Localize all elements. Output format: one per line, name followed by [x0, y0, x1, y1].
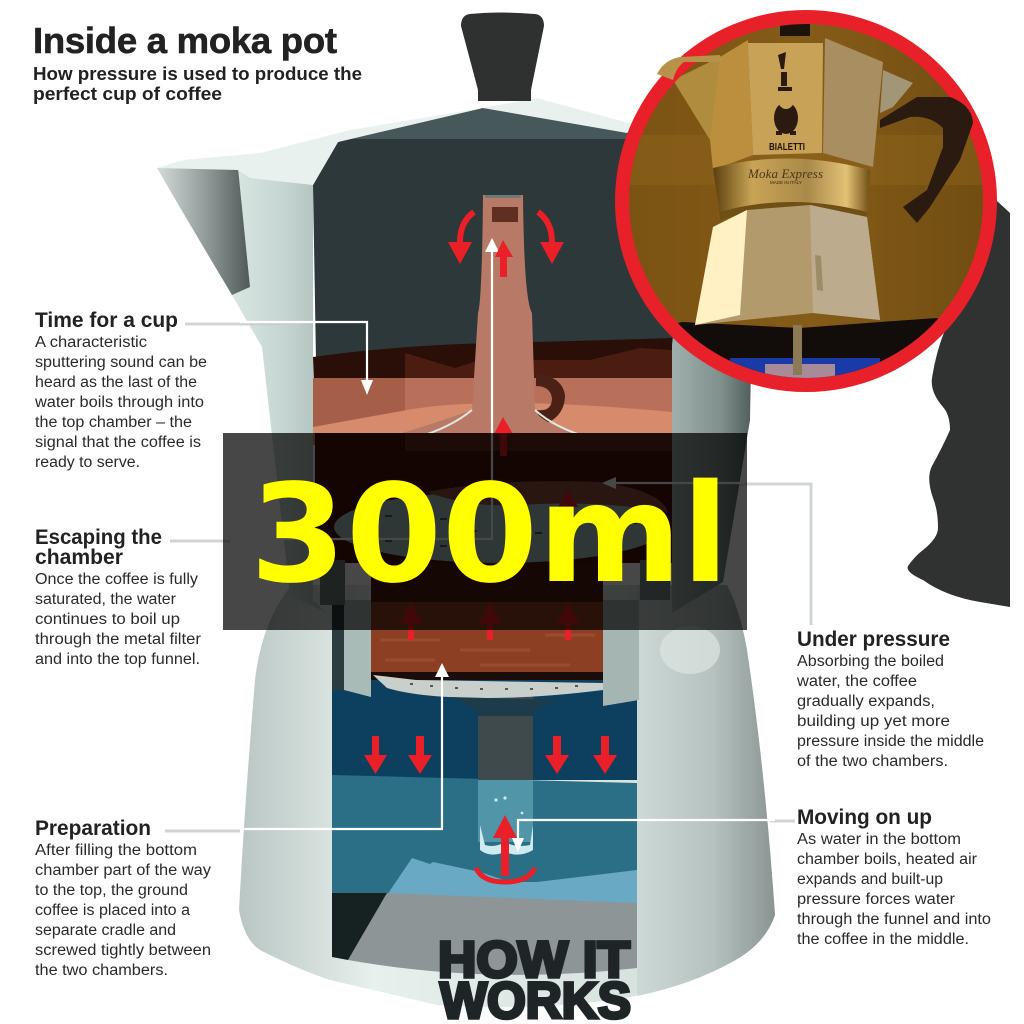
text block: Under pressure: water, the coffee [796, 673, 917, 690]
text block: Preparation: separate cradle and [35, 922, 176, 939]
text block: Escaping the chamber: and into the top funnel. [35, 651, 200, 668]
text block: Time for a cup: ready to serve. [35, 454, 140, 471]
text block: Under pressure [796, 628, 984, 770]
callout leader lines [225, 250, 775, 842]
lower chamber cutaway [332, 600, 637, 975]
text block: Escaping the chamber: through the metal filter [35, 631, 201, 648]
How It Works logo [438, 931, 631, 1024]
middle chamber and filter plate [315, 433, 672, 605]
text block: Time for a cup: A characteristic [35, 334, 147, 351]
upper chamber interior [313, 108, 700, 360]
handle [900, 190, 1010, 607]
metal sleeves of lower filter [344, 600, 639, 706]
curved arrow right [538, 212, 552, 242]
band script: Moka Express [747, 166, 823, 181]
band small text: MADE IN ITALY [770, 180, 802, 185]
collar band [713, 158, 870, 217]
text block: Moving on up: pressure forces water [797, 891, 955, 908]
How It Works logo: HOW IT [438, 931, 630, 988]
text block: Time for a cup: Time for a cup [35, 309, 178, 332]
bialetti logo figure [774, 52, 798, 135]
text block: Time for a cup: heard as the last of the [35, 374, 197, 391]
middle arrow up [558, 490, 578, 530]
text block: Moving on up: expands and built-up [797, 871, 943, 888]
subtitle [33, 63, 362, 104]
text block: Preparation: to the top, the ground [35, 882, 188, 899]
text block: Under pressure: Under pressure [797, 628, 950, 651]
text block: Moving on up: through the funnel and into [797, 911, 991, 928]
upper chamber outer right wall [672, 150, 755, 613]
left panel [710, 40, 753, 170]
spout lip overlapping ring [657, 55, 722, 80]
burner [678, 318, 938, 378]
text block: Time for a cup: water boils through into [34, 394, 204, 411]
text block: Under pressure: pressure inside the middle [797, 733, 984, 750]
text block: Escaping the chamber: chamber [35, 546, 123, 569]
callout leader shadows [165, 324, 811, 831]
coffee arrows up [400, 602, 422, 640]
upper chamber outer left wall [232, 170, 325, 612]
circular photo inset: Bialetti pot on a burner [615, 10, 1000, 392]
text block: Under pressure: of the two chambers. [797, 753, 948, 770]
text block: Preparation: coffee is placed into a [35, 902, 190, 919]
lower body [695, 205, 880, 325]
text block: Time for a cup [34, 309, 207, 471]
translucent capacity banner [223, 433, 747, 630]
text block: Moving on up [797, 806, 991, 948]
logo wordmark: BIALETTI [769, 141, 805, 153]
right panel [823, 38, 883, 167]
text block: Moving on up: Moving on up [797, 806, 932, 829]
text block: Preparation [35, 817, 211, 979]
perforated filter cradle [373, 675, 603, 716]
funnel stem with rising water [478, 690, 533, 855]
lid with knob [157, 12, 640, 185]
title: Inside a moka pot [33, 20, 337, 61]
text block: Preparation: the two chambers. [35, 962, 168, 979]
mid funnel arrow up [494, 417, 513, 456]
photo background [629, 24, 983, 378]
red flow arrows [364, 212, 617, 882]
handle connector [880, 70, 913, 113]
funnel arrow up [495, 240, 513, 277]
text block: Escaping the chamber: Once the coffee is fully [35, 571, 198, 588]
text block: Moving on up: the coffee in the middle. [797, 931, 969, 948]
text block: Escaping the chamber: saturated, the water [35, 591, 176, 608]
text block: Preparation: screwed tightly between [35, 942, 211, 959]
text block: Moving on up: As water in the bottom [797, 831, 961, 848]
subtitle: perfect cup of coffee [33, 83, 222, 104]
text block: Escaping the chamber: Escaping the [35, 526, 162, 549]
lower chamber outer shell [239, 585, 775, 1007]
text block: Time for a cup: sputtering sound can be [35, 354, 207, 371]
text block: Preparation: chamber part of the way [35, 862, 211, 879]
pot handle overlapping ring [880, 97, 973, 223]
callout arrowheads [361, 238, 616, 852]
text block: Preparation: Preparation [35, 817, 151, 840]
text block: Moving on up: chamber boils, heated air [797, 851, 977, 868]
water arrows down [364, 736, 387, 774]
text block: Under pressure: gradually expands, [797, 693, 935, 710]
spout [157, 168, 250, 295]
brewed coffee in top chamber [313, 338, 672, 450]
text block: Under pressure: Absorbing the boiled [797, 653, 944, 670]
front panel [748, 43, 823, 155]
rising anchor arrow [476, 815, 535, 882]
central funnel column [363, 195, 610, 445]
coffee grounds basket [371, 560, 603, 680]
pot spout body [674, 62, 720, 140]
subtitle: How pressure is used to produce the [33, 63, 362, 84]
curved arrow left [460, 212, 474, 242]
text block: Under pressure: building up yet more [797, 713, 950, 730]
text block: Time for a cup: the top chamber – the [35, 414, 192, 431]
text block: Preparation: After filling the bottom [35, 842, 197, 859]
capacity label: 300ml [250, 456, 729, 614]
text block: Time for a cup: signal that the coffee is [35, 434, 201, 451]
text block: Escaping the chamber: continues to boil up [35, 611, 180, 628]
text block: Escaping the chamber [35, 526, 201, 668]
